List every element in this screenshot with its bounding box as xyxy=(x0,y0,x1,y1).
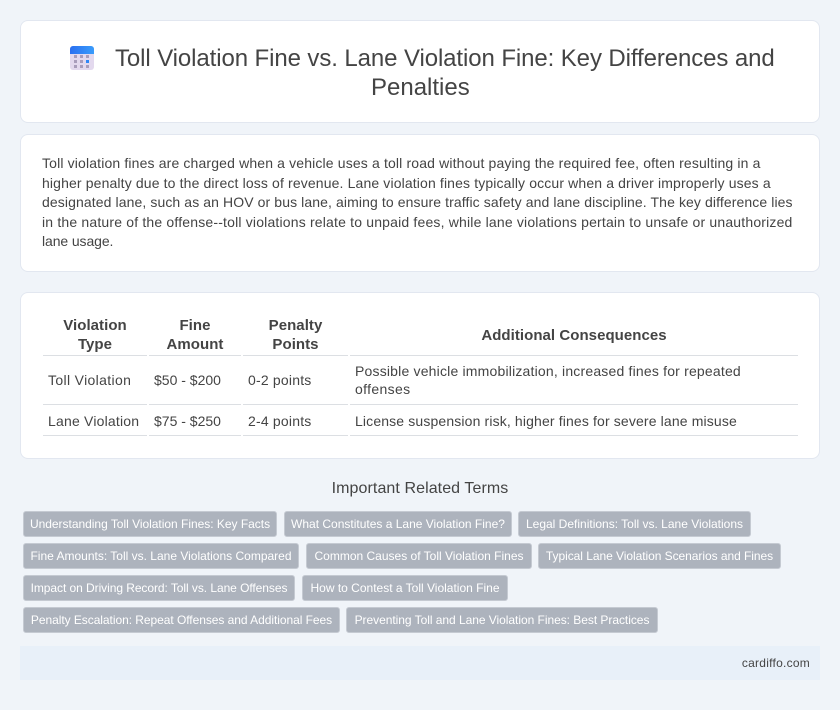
panel: summary text xyxy=(20,134,820,272)
tag xyxy=(23,607,340,633)
table row: toll violation: 0-2 points xyxy=(248,372,311,388)
panel: header xyxy=(20,20,820,123)
panel: related term tags xyxy=(23,511,781,633)
table row: lane violation: License suspension risk, higher fines for severe lane misuse xyxy=(355,413,737,429)
table header: Penalty xyxy=(269,317,322,334)
tag: Fine Amounts: Toll vs. Lane Violations Compared xyxy=(30,549,292,563)
title: Penalties xyxy=(371,74,470,101)
table header: Violation xyxy=(63,317,127,334)
tag xyxy=(284,511,512,537)
tag xyxy=(302,575,508,601)
tag xyxy=(23,543,299,569)
table header: Fine xyxy=(179,317,211,334)
footer bar xyxy=(20,646,820,680)
table row: toll violation xyxy=(48,363,741,397)
table header: Additional Consequences xyxy=(481,327,667,344)
summary paragraph xyxy=(42,155,793,249)
table header: Type xyxy=(78,336,112,353)
summary paragraph: higher penalty due to the direct loss of revenue. Lane violation fines typically occur when a driver improperly uses a xyxy=(42,174,771,190)
tag: How to Contest a Toll Violation Fine xyxy=(310,581,500,595)
panel: comparison table xyxy=(20,292,820,459)
table row: toll violation: $50 - $200 xyxy=(154,372,221,388)
table header: Amount xyxy=(167,336,223,353)
tag xyxy=(23,511,277,537)
summary paragraph: designated lane, such as an HOV or bus lane, aiming to ensure traffic safety and lane discipline. The key difference lies xyxy=(42,194,793,210)
table row: lane violation: $75 - $250 xyxy=(154,413,221,429)
title: Toll Violation Fine vs. Lane Violation Fine: Key Differences and xyxy=(115,45,775,72)
table row: toll violation: Toll Violation xyxy=(48,372,131,388)
tag: Penalty Escalation: Repeat Offenses and Additional Fees xyxy=(31,613,332,627)
tag: Common Causes of Toll Violation Fines xyxy=(314,549,524,563)
table header xyxy=(63,317,667,353)
tag: What Constitutes a Lane Violation Fine? xyxy=(291,517,505,531)
icon: calendar xyxy=(70,46,94,70)
tag xyxy=(518,511,751,537)
tag: Legal Definitions: Toll vs. Lane Violations xyxy=(526,517,743,531)
title xyxy=(115,45,775,101)
tag xyxy=(538,543,781,569)
heading: important related terms: Important Related Terms xyxy=(332,480,508,497)
table row: lane violation xyxy=(48,413,737,429)
footer source label: cardiffo.com xyxy=(742,656,810,670)
tag: Impact on Driving Record: Toll vs. Lane Offenses xyxy=(31,581,287,595)
summary paragraph: lane usage. xyxy=(42,233,113,249)
table row: toll violation: offenses xyxy=(355,381,410,397)
tag: Preventing Toll and Lane Violation Fines: Best Practices xyxy=(355,613,649,627)
table row: lane violation: Lane Violation xyxy=(48,413,139,429)
table row: toll violation: Possible vehicle immobilization, increased fines for repeated xyxy=(355,363,741,379)
tag: Typical Lane Violation Scenarios and Fines xyxy=(546,549,773,563)
tag xyxy=(306,543,532,569)
tag xyxy=(346,607,658,633)
summary paragraph: in the nature of the offense--toll violations relate to unpaid fees, while lane violations pertain to unsafe or unauthorized xyxy=(42,214,793,230)
table row: lane violation: 2-4 points xyxy=(248,413,311,429)
table header: Points xyxy=(272,336,319,353)
tag xyxy=(23,575,295,601)
summary paragraph: Toll violation fines are charged when a vehicle uses a toll road without paying the required fee, often resulting in a xyxy=(42,155,761,171)
tag: Understanding Toll Violation Fines: Key Facts xyxy=(30,517,270,531)
